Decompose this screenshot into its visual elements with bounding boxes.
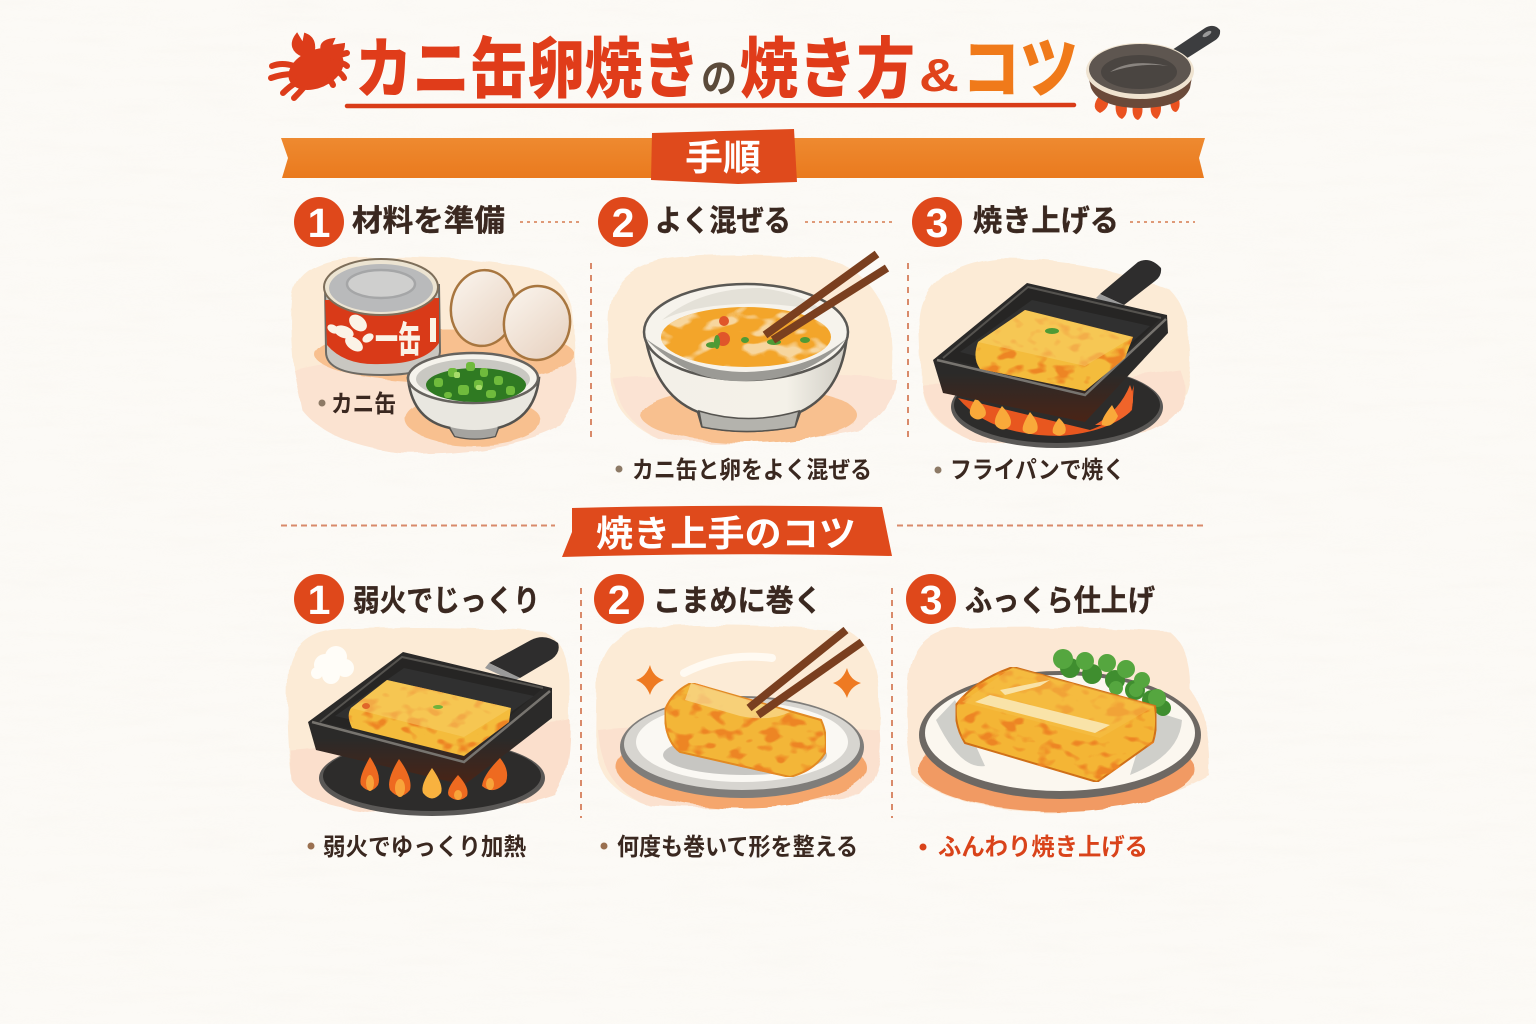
step 3 heading: 3 <box>926 200 948 246</box>
icon: square pan <box>933 260 1168 422</box>
section header: tips ribbon <box>281 506 1204 557</box>
section header: procedure ribbon <box>281 129 1205 184</box>
panel: tip 3 finished omelette illustration <box>906 627 1209 812</box>
title: カニ缶卵焼き <box>355 32 700 106</box>
icon: bowl of green onion <box>408 353 539 438</box>
step 1 heading: 材料を準備 <box>352 205 505 238</box>
omelette block <box>956 667 1156 782</box>
icon: steam puff <box>311 646 354 684</box>
text: finished item: ふんわり焼き上げる <box>938 834 1148 861</box>
section header: procedure ribbon: 手順 <box>685 137 761 178</box>
icon: sparkles and swoosh <box>636 657 861 698</box>
tip 3 heading: 3 <box>920 577 942 623</box>
tip 2 heading: 2 <box>608 577 630 623</box>
icon: square pan <box>308 637 559 785</box>
title: コツ <box>962 32 1078 106</box>
step 1 heading: 1 <box>308 200 330 246</box>
step 1 heading <box>294 197 582 247</box>
panel: step 1 ingredients illustration <box>291 257 576 453</box>
icon: crab can <box>324 259 440 375</box>
title underline <box>347 105 1074 106</box>
icon: eggs <box>446 266 575 364</box>
text: mix item: カニ缶と卵をよく混ぜる <box>632 457 872 484</box>
tip 2 heading <box>594 574 822 624</box>
text: can item: カニ缶 <box>331 391 396 418</box>
text: low heat item: 弱火でゆっくり加熱 <box>323 834 526 861</box>
panel: step 2 mixing illustration <box>608 254 895 443</box>
icon: crab can: 一缶 <box>375 319 421 360</box>
step 2 heading <box>598 197 893 247</box>
omelette block <box>349 680 511 756</box>
text: fry item: フライパンで焼く <box>950 457 1125 484</box>
tip 1 heading: 弱火でじっくり <box>353 585 540 618</box>
omelette roll <box>665 683 826 777</box>
tip 1 heading <box>294 574 540 624</box>
text: rolling item: 何度も巻いて形を整える <box>617 834 858 861</box>
panel: step 3 frying illustration <box>920 258 1191 448</box>
tip 3 heading: ふっくら仕上げ <box>965 585 1155 618</box>
title <box>355 32 1078 106</box>
icon: chopsticks <box>765 254 887 340</box>
panel: tip 1 low heat illustration <box>288 628 570 816</box>
step 3 heading: 焼き上げる <box>973 205 1119 238</box>
section header: tips ribbon: 焼き上手のコツ <box>596 513 856 554</box>
icon: gas burner <box>951 366 1163 448</box>
tip 2 heading: こまめに巻く <box>653 585 822 618</box>
icon: flames <box>360 757 507 800</box>
icon: chopsticks <box>749 630 862 715</box>
icon: greens <box>1053 649 1171 716</box>
panel: tip 2 rolling illustration <box>596 625 881 808</box>
step 2 heading: よく混ぜる <box>655 205 791 238</box>
title: の <box>701 57 737 101</box>
step 2 heading: 2 <box>612 200 634 246</box>
icon: mixing bowl <box>644 284 848 432</box>
tip 1 heading: 1 <box>308 577 330 623</box>
icon: plate <box>919 671 1201 799</box>
icon: plate <box>620 696 864 798</box>
icon: crab <box>271 34 350 98</box>
omelette block <box>975 310 1133 391</box>
title: 焼き方 <box>740 32 915 106</box>
icon: frying pan on flames <box>1086 26 1220 120</box>
icon: burner <box>319 740 545 816</box>
step 3 heading <box>912 197 1195 247</box>
title: & <box>919 49 959 101</box>
tip 3 heading <box>906 574 1155 624</box>
